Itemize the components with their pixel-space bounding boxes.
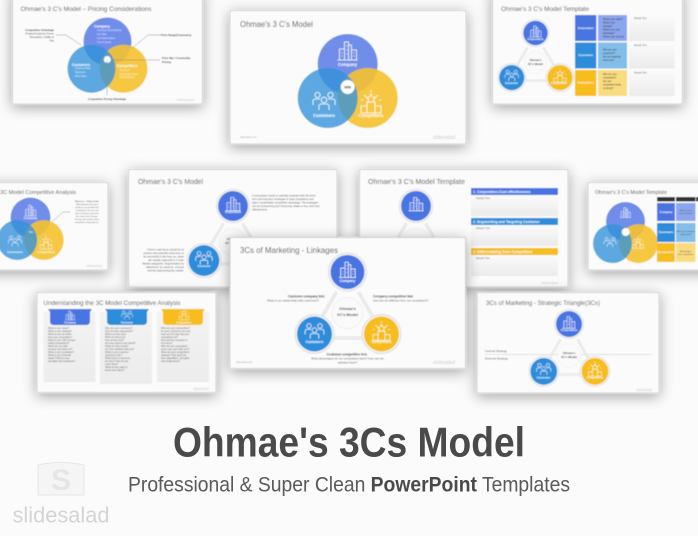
column: competitors: the future? [161, 342, 173, 345]
triangle diagram [529, 309, 610, 386]
logo: slidesalad [12, 462, 110, 528]
triangle diagram: Competitors [586, 376, 604, 380]
annotation text: product can provide that [75, 206, 99, 209]
comparison table: cost structure? [679, 212, 694, 215]
link label: company-competitive: How are we different from our competitors? [373, 298, 429, 302]
callouts: Pay [50, 38, 55, 42]
text block: corporation: have a sustainable competitive advantage. The strategies [252, 200, 319, 204]
triangle diagram: Corporation [561, 328, 578, 332]
triangle diagram: Company [340, 279, 355, 283]
column: competitors: competitors do? [161, 336, 179, 339]
column: company: What do you do better [48, 333, 72, 336]
heading: Ohmae's 3 C's Model Template [595, 190, 667, 196]
annotation text: Pricing and market share [75, 218, 100, 221]
column: company: status? What is your [48, 357, 70, 360]
column: company: than your competition? [48, 336, 73, 339]
text block: corporation: term and long term strategies to beat competitors and [252, 197, 314, 201]
column: customers: What are their needs? [105, 345, 129, 348]
table: corporation row [575, 15, 674, 41]
column: customers: How do they buy? [105, 339, 125, 342]
numbered bar 3: 3. Differentiating from Competitors [473, 250, 533, 254]
venn diagram: WIN [344, 86, 352, 90]
triangle diagram: Customer [505, 81, 519, 85]
watermark: slidesalad [636, 388, 652, 392]
column: competitors: Competitors [176, 320, 192, 324]
annotation text: should be compared too. [75, 221, 99, 224]
numbered bar 1: 1. Corporation-Cost effectiveness [473, 190, 531, 194]
table: corporation row: strategy? [603, 25, 613, 28]
column: competitors: hear you the way that your [161, 333, 189, 336]
text block: corporation: A corporation needs to carefully evaluate both the short [252, 194, 316, 198]
triangle diagram: 3C's Model [528, 62, 543, 66]
annotation text: the value that it brings. [76, 215, 98, 218]
triangle diagram: Customer [537, 376, 551, 380]
table: corporation row: Corporation [578, 26, 594, 30]
callouts: Product/Customer Focus [25, 32, 55, 36]
watermark: slidesalad [86, 264, 102, 268]
annotation text [52, 200, 100, 224]
panel: pricing considerations slide [12, 0, 202, 104]
triangle diagram: Ohmae's [339, 306, 357, 311]
column: competitors: serve now, and what next? [161, 348, 190, 351]
venn diagram: Cost of goods [97, 41, 112, 44]
table: customers row [575, 42, 674, 68]
venn diagram: Competitors [117, 64, 137, 68]
column: competitors: their capabilities, strengths [161, 357, 190, 360]
column: customers: Are they satisfied with you? [105, 348, 135, 351]
heading: Ohmae's 3 C's Model – Pricing Considerations [20, 6, 152, 13]
venn diagram: Company Specialization [97, 29, 122, 32]
column: customers: experience like? [105, 354, 123, 357]
text block: customer: be successful in the long run, these [143, 254, 185, 258]
heading: Ohmae's 3 C's Model [138, 179, 203, 186]
table: corporation row: advantage? [603, 32, 616, 35]
table: customers row: customers? [603, 52, 616, 55]
callouts: Pricing [162, 60, 171, 64]
callouts: Perception / Ability to [30, 35, 55, 39]
panel: understanding slide [37, 292, 216, 392]
annotation text: differentiation that your [76, 203, 98, 206]
column: customers: Are they loyal to your brand? [105, 342, 136, 345]
text block: corporation: can be Outsourcing and Insourcing, Make or buy, and Cost [252, 204, 320, 208]
comparison table [657, 197, 698, 262]
callouts: Price War / Commodity [162, 56, 191, 60]
column: company: What is your vision? [48, 327, 70, 330]
heading: 3Cs of Marketing - Linkages [240, 246, 338, 255]
triangle diagram: Ohmae's [227, 237, 240, 241]
comparison table: Competitors [658, 250, 675, 254]
column: customers: What kind of customers [105, 357, 131, 360]
watermark: slidesalad [433, 135, 455, 141]
triangle diagram [295, 253, 401, 354]
table: competitors row: Are your [603, 80, 612, 83]
watermark: slidesalad [176, 97, 194, 102]
heading: Ohmae's 3 C's Model Template [368, 179, 465, 186]
heading: Ohmae's 3 C's Model [240, 20, 313, 29]
venn diagram: Price Value [75, 75, 87, 78]
table: corporation row: What's your [603, 22, 615, 24]
venn diagram: Company [94, 24, 110, 28]
venn diagram [66, 16, 149, 94]
triangle diagram: Corporation [527, 37, 544, 41]
callouts: Price Range(Customers) [161, 33, 191, 37]
link label: customer-competitive [311, 352, 384, 364]
link label: customer-company [267, 294, 325, 302]
slide collage [0, 0, 698, 393]
watermark: slidesalad [433, 360, 455, 366]
table: customers row: Who are your [603, 48, 617, 52]
table: competitors row: Sample Text [634, 72, 647, 74]
text block: corporation [252, 194, 320, 212]
table: corporation row: What's your cost [603, 28, 620, 32]
text block: customer: objectively, by customer, concept [146, 265, 184, 269]
triangle diagram: Ohmae's [529, 58, 542, 62]
numbered bar 3: Sample Text [476, 257, 490, 260]
triangle diagram: Competitors [372, 340, 392, 344]
column: customers: know more about? [105, 369, 125, 372]
triangle diagram: Customer [197, 264, 211, 268]
panel: strategic triangle slide [477, 292, 659, 393]
comparison table: Company [660, 210, 673, 214]
numbered bar 3 [471, 248, 558, 276]
internal and external strategy divider: External Strategy [485, 356, 509, 360]
table: customers row: Are you targeting [603, 56, 621, 58]
triangle diagram: Ohmae's [563, 351, 576, 355]
numbered bar 2: Sample Text [476, 227, 490, 230]
column: customers: How are they segmented? [105, 330, 134, 333]
column: company: Company [64, 320, 76, 324]
venn diagram [0, 197, 65, 261]
venn diagram [296, 32, 399, 130]
table: competitors row: Who are your [603, 73, 617, 76]
triangle diagram [498, 19, 574, 92]
venn diagram: Competitors [37, 250, 55, 254]
column: competitors: Who do your competitors [161, 345, 188, 348]
table: competitors row: or strong? [603, 87, 614, 90]
panel: marketing linkages slide [230, 238, 466, 368]
table: corporation row: Sample Text [634, 17, 647, 20]
comparison table: over competitors [678, 253, 695, 256]
text block: customer [142, 248, 185, 272]
panel: competitive table slide (right) [588, 182, 698, 270]
column: competitors: and weaknesses? [161, 360, 181, 363]
triangle diagram: Competitors [551, 81, 568, 85]
annotation text: Real use – Think of the [75, 200, 100, 203]
column: competitors: How will they compete in [161, 339, 188, 342]
text block: corporation: effectiveness. [252, 208, 268, 212]
table: customers row: Customers [578, 53, 593, 57]
table: competitors row: competitors weak [603, 84, 622, 86]
triangle diagram [187, 189, 280, 278]
callouts: Competitive Advantage [25, 28, 55, 32]
footer: slidesalad.com [236, 361, 253, 364]
watermark: slidesalad [541, 281, 558, 285]
column: competitors: strategy? How good are [161, 354, 187, 357]
column: company: What is your reputation? [48, 351, 75, 354]
column: competitors [157, 308, 209, 382]
triangle diagram: 3C's Model [337, 312, 358, 317]
numbered bar 1: Sample Text [476, 197, 490, 200]
panel: main venn slide [230, 10, 466, 144]
column: customers: Customer [121, 320, 133, 324]
column: company: selling proposition)? [48, 342, 70, 345]
comparison table: really want? [680, 233, 692, 236]
link label: customer-competitive: What advantages do our competitors have? How can we [311, 356, 384, 360]
callouts [25, 28, 191, 101]
heading: 3Cs of Marketing - Strategic Triangle(3Cs) [486, 301, 600, 307]
internal and external strategy divider [485, 349, 652, 360]
column: customers: are they? How do you [105, 360, 129, 363]
venn diagram [592, 201, 659, 264]
comparison table: Customers [659, 230, 674, 234]
internal and external strategy divider: Internal Strategy [485, 349, 508, 353]
link label: company-competitive: Company-competitive link: [373, 294, 414, 298]
text block: customer: and the segmenting the market. [148, 268, 184, 272]
numbered bar 2 [471, 218, 558, 246]
venn diagram: Competitor Costs [120, 73, 139, 76]
venn diagram: Differentiation [120, 76, 135, 79]
main title: Ohmae's 3Cs Model [173, 418, 525, 466]
annotation text: how customers perceive [75, 212, 100, 215]
link label: customer-company: What is our relationship with customers? [267, 298, 319, 302]
watermark: slidesalad [193, 387, 209, 391]
table: customers row: Sample Text [634, 44, 647, 47]
venn diagram: Customers [313, 113, 336, 118]
link label: customer-company: Customer-company link: [288, 294, 325, 298]
venn diagram: Use Data [97, 33, 107, 36]
column: company: What is your USP (unique [48, 339, 76, 342]
column: customers: What do they want to [105, 366, 128, 369]
column: customers: What is your customer [105, 351, 129, 354]
numbered bar 1 [471, 188, 558, 216]
table: corporation row: What's your concept [603, 36, 624, 38]
venn diagram: Customers [72, 63, 90, 67]
table: competitors row [575, 70, 674, 96]
triangle diagram [370, 189, 463, 278]
column: competitors: Who are your competitors? [161, 327, 190, 330]
venn diagram: Cost Minimization [97, 37, 116, 40]
panel: template slide with table [492, 0, 682, 104]
column: company: What is your strategy? [48, 330, 72, 333]
comparison table: What is your [680, 209, 692, 212]
panel: cost effectiveness slide [128, 170, 337, 287]
column: company: What can you take [48, 345, 68, 348]
column: customers: Where do they buy? [105, 333, 127, 336]
table: corporation row: What's your vision? [603, 18, 624, 21]
panel: numbered template slide [360, 170, 568, 287]
subtitle: Professional & Super Clean PowerPoint Templates [128, 474, 570, 496]
heading: Understanding the 3C Model Competitive Analysis [44, 300, 181, 307]
panel: competitive analysis slide (left) [0, 182, 108, 270]
comparison table: Advantages [680, 250, 692, 253]
wordmark: slidesalad [12, 502, 110, 528]
column: customers: Who are your customers? [105, 327, 133, 330]
triangle diagram: 3C's Model [561, 355, 577, 359]
table: competitors row: competitors? [603, 76, 617, 80]
column: company [44, 309, 96, 382]
table: customers row: them now? [603, 59, 615, 62]
heading: Ohmae's 3 C's Model Template [501, 6, 589, 13]
column: competitors: What are your competitors' [161, 351, 190, 354]
column: company: strengths and weakness? [48, 360, 76, 363]
comparison table: What do customers [676, 230, 696, 233]
link label: company-competitive [373, 294, 429, 302]
venn diagram: Segments [75, 71, 86, 74]
triangle diagram: Corporation [225, 210, 241, 214]
column: company: What is your financial [48, 354, 71, 357]
venn diagram: Win [29, 231, 34, 234]
table: competitors row: Competitors [577, 80, 594, 84]
venn diagram: Customers [7, 250, 23, 254]
text block: customer: are usually organized in 4 main [148, 258, 185, 262]
column: customers: reach them? [105, 363, 119, 366]
annotation text: competitors do not, and [76, 209, 99, 212]
venn diagram: Competitors [359, 113, 384, 118]
column: customers [100, 309, 152, 384]
icon: S box: S [51, 464, 71, 497]
numbered bar 2: 2. Segmenting and Targeting Customer [473, 220, 540, 224]
venn diagram: Pricing of [120, 69, 130, 72]
column: customers: When do they buy? [105, 336, 126, 339]
text block: customer: Market categories. Segmentation by [142, 262, 185, 266]
venn diagram: Customer Base [75, 67, 92, 70]
footer: slidesalad.com [240, 136, 257, 139]
column: competitors: Do your customers see and [161, 330, 191, 333]
link label: customer-competitive: sidestep them? [338, 360, 358, 364]
venn diagram: Company [24, 216, 38, 220]
column: company: forward, and what not? [48, 348, 73, 351]
triangle diagram: Customers [306, 340, 323, 344]
venn diagram: Company [338, 62, 358, 67]
triangle diagram: 3C's Model [225, 241, 241, 245]
callouts: Competitive Pricing Advantage [88, 97, 127, 101]
link label: customer-competitive: Customer-competitive link: [326, 352, 368, 356]
text block: customer: A firm's main focus should be its [147, 248, 185, 252]
text block: customer: present and potential customers: to [143, 251, 185, 255]
